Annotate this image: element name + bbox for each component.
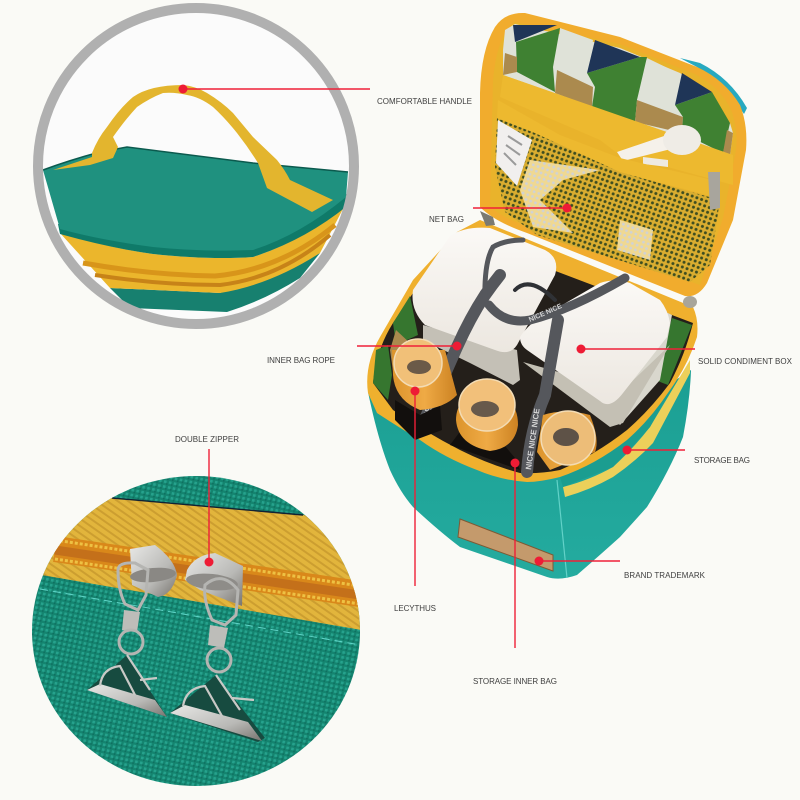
callout: double zipper [175, 435, 239, 566]
callout: storage inner bag: STORAGE INNER BAG [473, 677, 557, 686]
white measuring spoon [617, 125, 701, 167]
orange zipper teeth [55, 549, 360, 594]
callout: inner bag rope: INNER BAG ROPE [267, 356, 335, 365]
lecythus bottle 1 [392, 339, 457, 440]
navy triangle pattern [513, 25, 712, 105]
lid orange rim [480, 13, 746, 296]
condiment box: right [520, 280, 670, 427]
icon: right zipper pull [170, 553, 265, 742]
lid piping [58, 194, 348, 258]
rope lettering: NICE NICE [528, 303, 563, 324]
lower teal bag strip [110, 253, 320, 312]
panel: handle close-up circle [43, 85, 348, 312]
callout: net bag: NET BAG [429, 215, 464, 224]
rope lettering: NICE NICE NICE [418, 366, 451, 427]
callout: lecythus [394, 386, 436, 613]
pocket zipper pull [708, 172, 720, 210]
right hinge [683, 296, 697, 308]
circle ring [38, 8, 354, 324]
panel: bag body [367, 220, 698, 579]
lid printed lining [503, 24, 733, 155]
teal lid back edge [680, 58, 747, 114]
lecythus bottle 2 [450, 379, 520, 470]
condiment box: left [412, 228, 556, 385]
callout: net bag [429, 204, 572, 224]
yellow pocket binding [497, 100, 714, 197]
callout: double zipper: DOUBLE ZIPPER [175, 435, 239, 444]
icon: left zipper pull [87, 545, 177, 717]
net pocket [495, 118, 720, 282]
rope lettering [418, 303, 563, 470]
brand trademark patch [458, 519, 553, 571]
bag interior [373, 250, 693, 473]
callout: inner bag rope [267, 342, 462, 365]
rope lettering: NICE NICE NICE [524, 407, 542, 470]
callout: brand trademark: BRAND TRADEMARK [624, 571, 706, 580]
callout: comfortable handle [178, 84, 472, 106]
callout: comfortable handle: COMFORTABLE HANDLE [377, 97, 472, 106]
panel: open bag lid [480, 13, 747, 308]
callout: solid condiment box: SOLID CONDIMENT BOX [698, 357, 793, 366]
callout: storage bag [622, 446, 750, 465]
side zipper tape [563, 360, 690, 497]
inner bag rope [421, 240, 625, 472]
yellow zipper tape [43, 498, 360, 630]
stitching [40, 589, 360, 645]
lecythus bottle 3 [537, 411, 597, 470]
panel: zipper close-up circle [32, 476, 360, 786]
green interior lining [373, 296, 692, 400]
teal front rim [560, 350, 692, 487]
orange zipper teeth [83, 225, 335, 276]
callout: storage bag: STORAGE BAG [694, 456, 750, 465]
yellow rim [367, 220, 698, 482]
yellow zipper tape [60, 205, 345, 293]
lid yellow inner frame [490, 22, 736, 285]
callout: storage inner bag [473, 458, 557, 686]
care label [496, 120, 532, 186]
upper yellow pocket flap [500, 75, 733, 185]
callout: brand trademark [534, 556, 706, 580]
teal outer body [368, 370, 691, 579]
woven teal fabric [30, 475, 362, 788]
callout: solid condiment box [576, 344, 793, 366]
callout: lecythus: LECYTHUS [394, 604, 436, 613]
teal lid top [43, 147, 348, 251]
left hinge [480, 211, 495, 226]
handle [53, 85, 333, 212]
